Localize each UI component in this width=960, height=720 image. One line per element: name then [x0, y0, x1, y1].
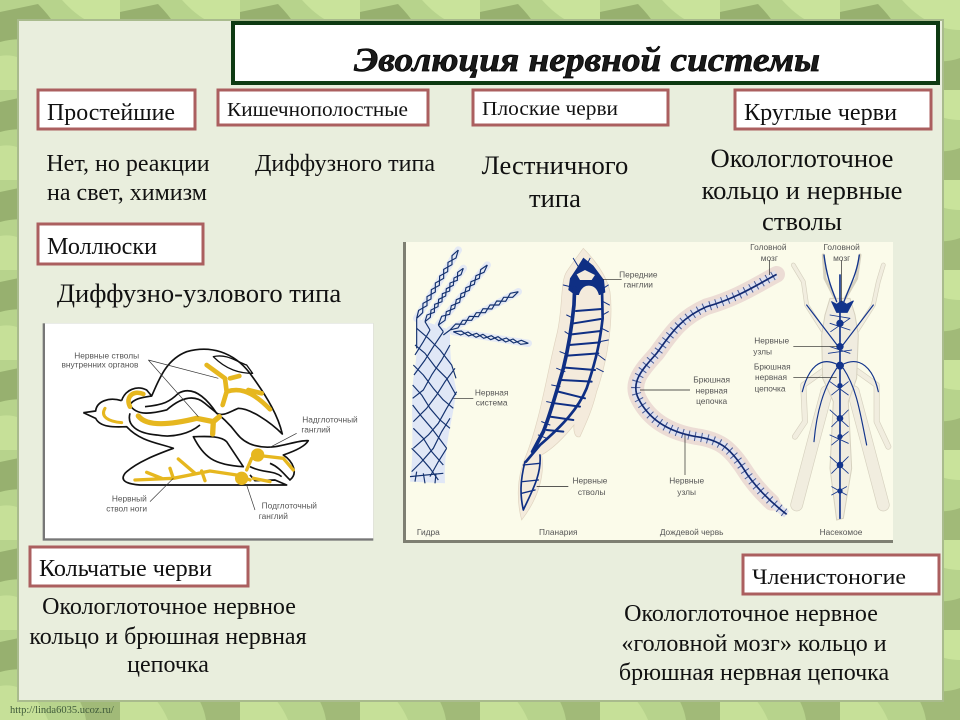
earthworm: [619, 242, 788, 537]
earthworm: Передние: [619, 269, 658, 279]
diagram: mollusc nervous system: [43, 323, 373, 541]
text: круглые черви: кольцо и нервные: [702, 175, 902, 205]
snail labels: [61, 350, 358, 521]
label: Кольчатые черви: Кольчатые черви: [39, 556, 212, 582]
insect: Насекомое: [820, 527, 863, 537]
text: членистоногие: «головной мозг» кольцо и: [621, 631, 887, 657]
earthworm: Брюшная: [693, 375, 730, 385]
label: Плоские черви: Плоские черви: [482, 98, 618, 120]
snail outline: [83, 349, 308, 485]
label: Моллюски: [38, 224, 203, 264]
snail labels: Нервные стволы: [74, 350, 139, 360]
insect: нервная: [755, 372, 787, 382]
earthworm: узлы: [677, 487, 696, 497]
label: Кишечнополостные: Кишечнополостные: [227, 99, 408, 121]
insect nerves: [802, 255, 878, 518]
planaria: Нервные: [573, 475, 608, 485]
text: простейшие: на свет, химизм: [47, 180, 207, 206]
insect: мозг: [833, 253, 850, 263]
source url: http://linda6035.ucoz.ru/: [10, 705, 114, 716]
earthworm: ганглии: [624, 280, 653, 290]
text: моллюски: Диффузно-узлового типа: [57, 278, 341, 308]
text: кольчатые черви: Окологлоточное нервное: [42, 594, 296, 620]
text: плоские черви: Лестничного: [482, 150, 628, 180]
insect: Брюшная: [754, 361, 791, 371]
insect: цепочка: [754, 384, 786, 394]
text: кольчатые черви: цепочка: [127, 652, 209, 678]
insect legs and body: [793, 255, 888, 505]
label: Кишечнополостные: [218, 90, 428, 125]
yellow nerves: [104, 365, 293, 485]
snail labels: Подглоточный: [262, 500, 317, 510]
snail labels: внутренних органов: [61, 360, 139, 370]
text: членистоногие: Окологлоточное нервное: [624, 601, 878, 627]
label: Простейшие: Простейшие: [47, 100, 175, 126]
text: круглые черви: Окологлоточное: [711, 143, 893, 173]
hydra: [410, 250, 528, 483]
planaria: система: [476, 398, 508, 408]
label: Плоские черви: [473, 90, 668, 125]
insect: Нервные: [754, 335, 789, 345]
diagram: nervous systems of four animals: [403, 242, 893, 543]
earthworm: Нервные: [669, 476, 704, 486]
label: Членистоногие: Членистоногие: [752, 564, 906, 589]
insect: узлы: [753, 346, 772, 356]
earthworm: нервная: [696, 385, 728, 395]
label: Простейшие: [38, 90, 195, 129]
earthworm: Дождевой червь: [660, 527, 723, 537]
earthworm: цепочка: [696, 396, 728, 406]
planaria: Планария: [539, 527, 578, 537]
label: Членистоногие: [743, 555, 939, 594]
insect: Головной: [823, 242, 860, 252]
text: кишечнополостные: Диффузного типа: [255, 151, 435, 177]
label: Круглые черви: Круглые черви: [744, 100, 897, 126]
label: Моллюски: Моллюски: [47, 234, 157, 260]
snail labels: ганглий: [259, 511, 288, 521]
snail labels: ствол ноги: [106, 504, 147, 514]
text: плоские черви: типа: [529, 183, 581, 213]
leader lines: [148, 360, 297, 510]
planaria: стволы: [578, 487, 605, 497]
planaria head ganglia: [568, 258, 605, 295]
planaria: Нервная: [475, 388, 508, 398]
text: кольчатые черви: кольцо и брюшная нервная: [29, 624, 307, 650]
earthworm: мозг: [761, 253, 778, 263]
snail labels: Надглоточный: [302, 415, 358, 425]
earthworm: Головной: [750, 242, 787, 252]
text: простейшие: Нет, но реакции: [46, 151, 210, 177]
title: [233, 23, 938, 83]
text: круглые черви: стволы: [762, 206, 842, 236]
title: Эволюция нервной системы: [354, 42, 820, 79]
planaria: Гидра: [417, 527, 440, 537]
insect: [753, 242, 888, 537]
label: Круглые черви: [735, 90, 931, 129]
snail labels: Нервный: [112, 494, 147, 504]
planaria: [417, 248, 622, 537]
text: членистоногие: брюшная нервная цепочка: [619, 660, 889, 686]
label: Кольчатые черви: [30, 547, 248, 586]
snail labels: ганглий: [301, 425, 331, 435]
